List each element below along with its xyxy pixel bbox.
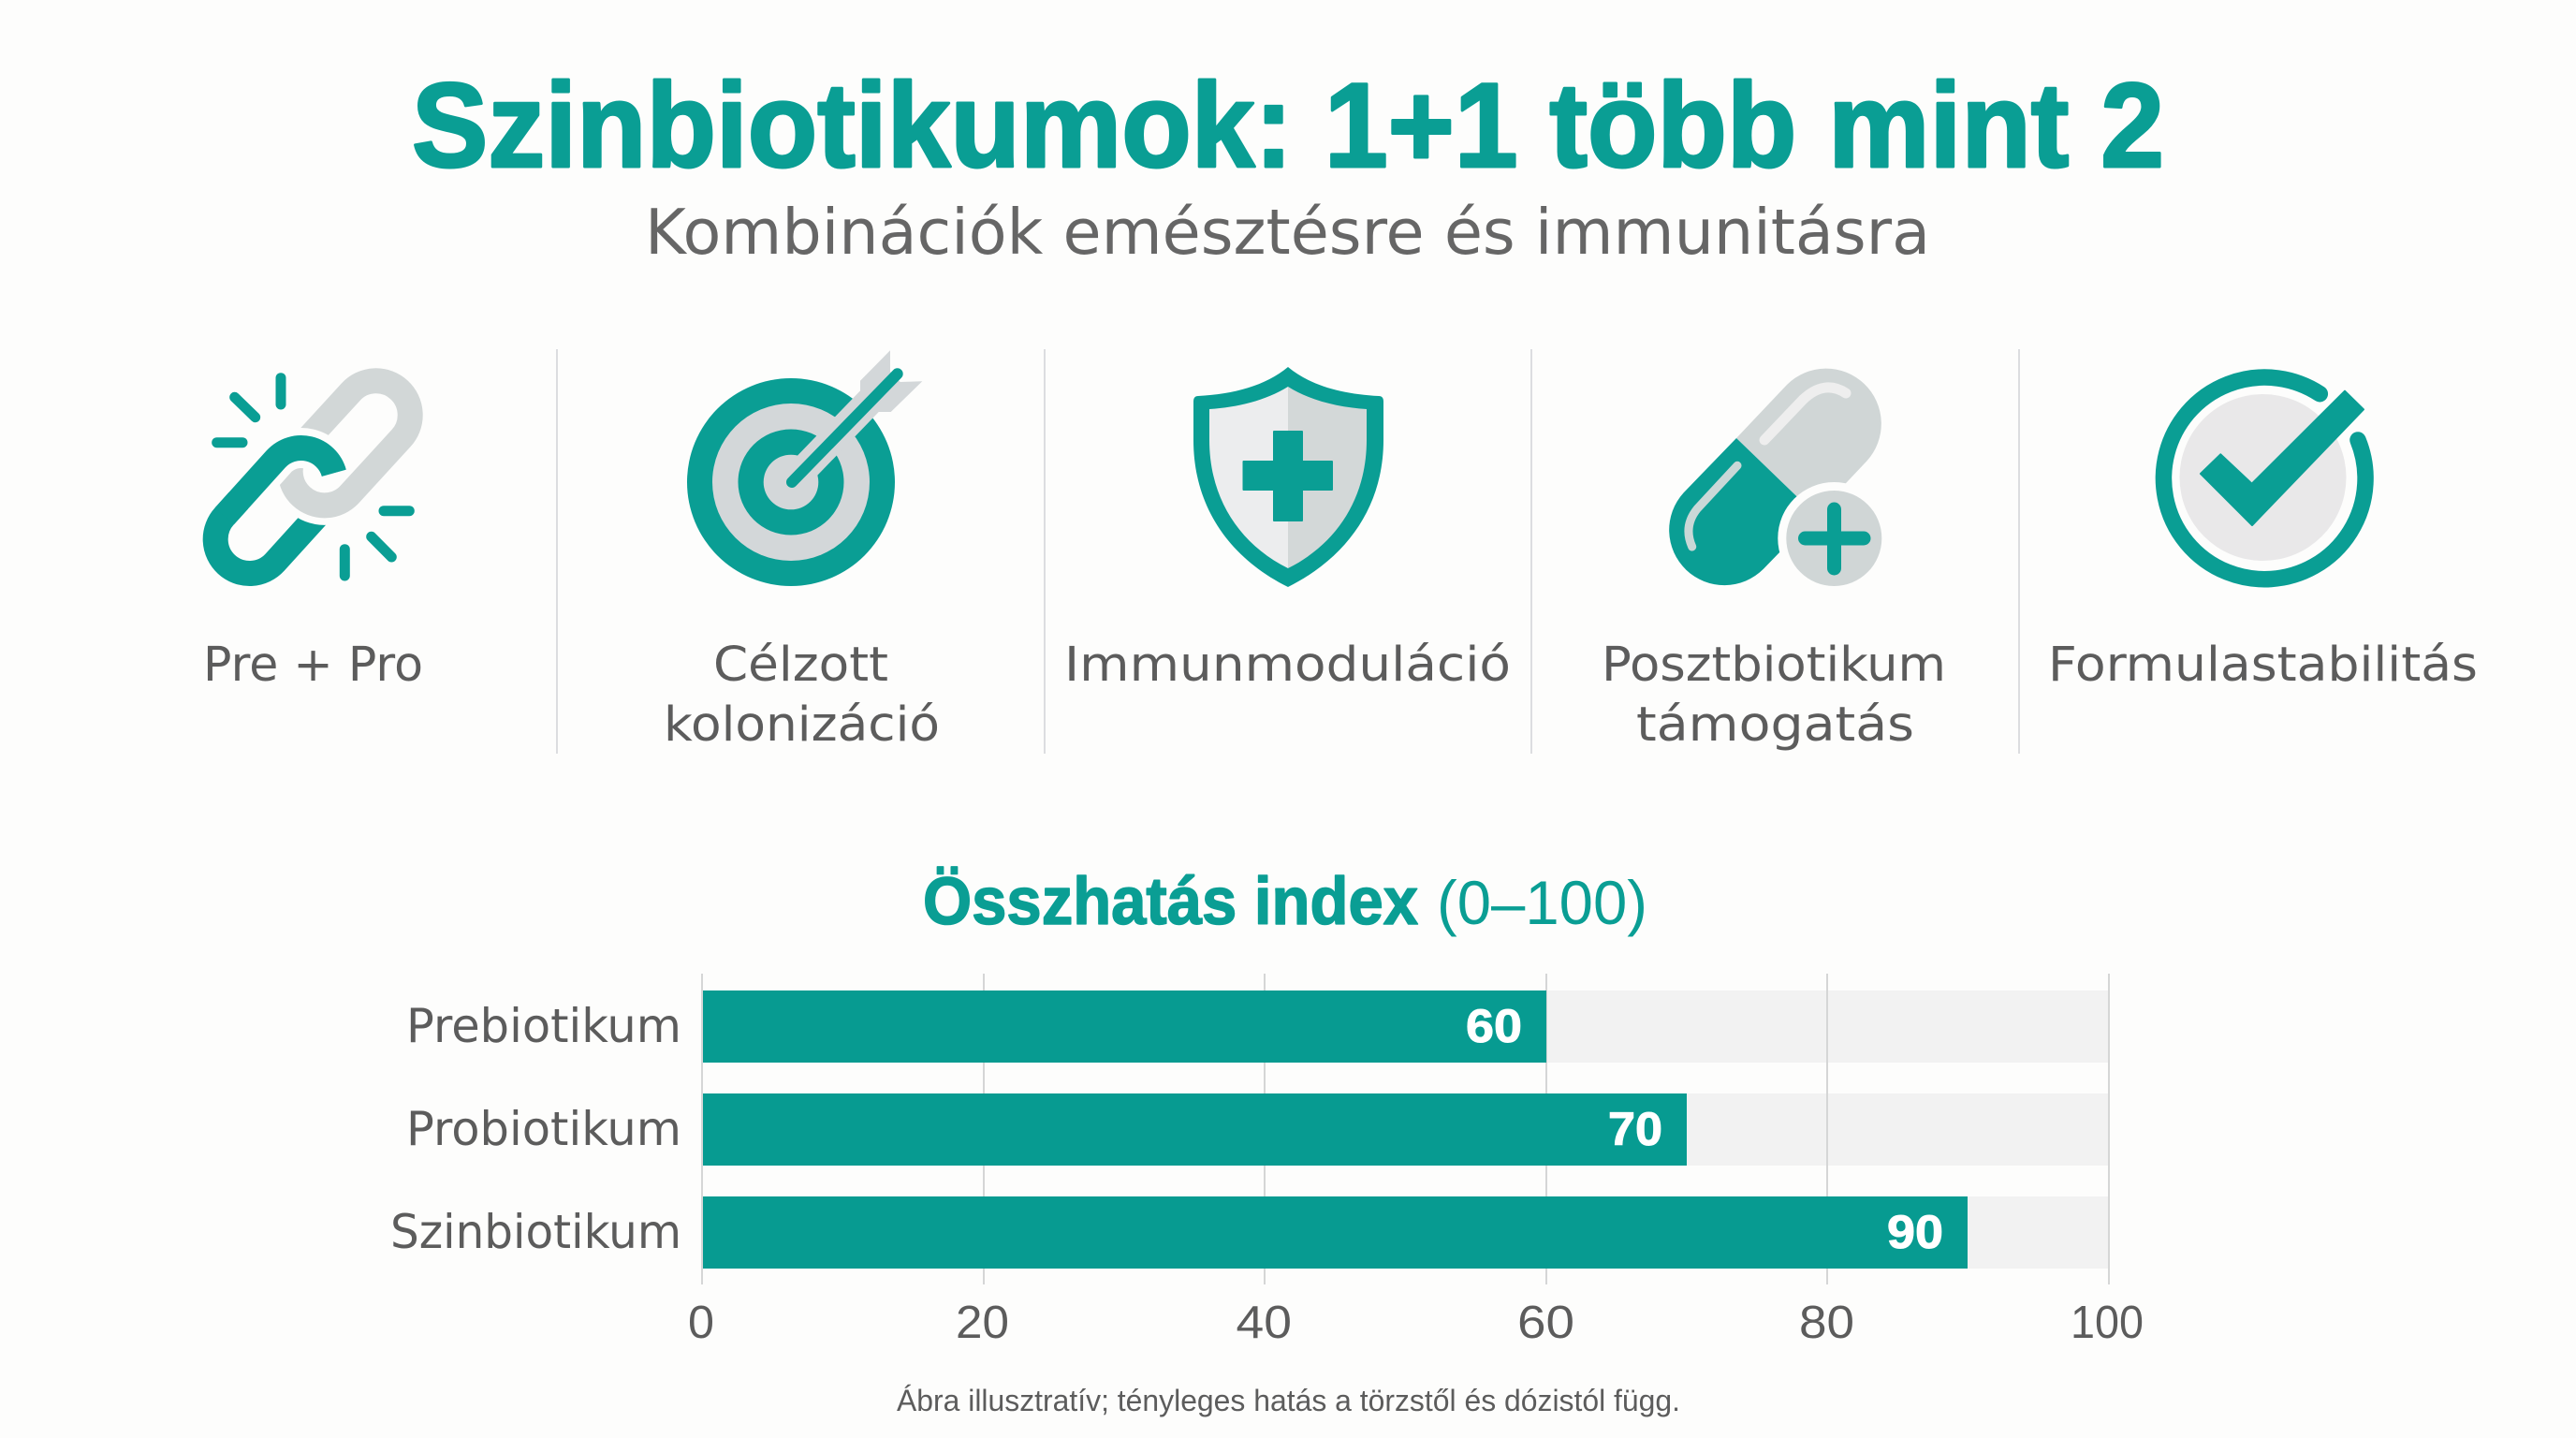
title: Szinbiotikumok: 1+1 több mint 2 <box>412 59 2164 193</box>
label: Posztbiotikum támogatás: támogatás <box>1636 697 1914 753</box>
icon: shield with cross <box>1193 367 1383 587</box>
bar: Szinbiotikum 90 <box>703 1196 1968 1269</box>
chart heading: Összhatás index <box>923 865 1418 939</box>
axis labels: 40 <box>1236 1298 1292 1348</box>
category labels: Prebiotikum <box>406 999 681 1053</box>
label: Célzott kolonizáció <box>664 638 940 753</box>
icon: target with arrow <box>687 350 922 586</box>
footnote: Ábra illusztratív; tényleges hatás a törzstől és dózistól függ. <box>897 1384 1680 1417</box>
axis labels: 20 <box>956 1298 1009 1348</box>
bar: Prebiotikum 60: 60 <box>1466 1000 1522 1052</box>
icon: check in circle <box>2163 377 2365 580</box>
bar: Prebiotikum 60 <box>703 990 1546 1063</box>
bar tracks <box>702 990 2109 1269</box>
subtitle: Kombinációk emésztésre és immunitásra <box>645 196 1930 269</box>
category labels: Szinbiotikum <box>390 1205 681 1259</box>
axis labels: 60 <box>1517 1298 1574 1348</box>
label: Posztbiotikum támogatás: Posztbiotikum <box>1602 638 1946 693</box>
bar chart <box>390 974 2144 1348</box>
panel: Immunmoduláció <box>1064 367 1511 693</box>
label: Formulastabilitás: Formulastabilitás <box>2048 638 2478 693</box>
label: Posztbiotikum támogatás <box>1602 638 1946 753</box>
panel: Posztbiotikum támogatás <box>1602 369 1946 753</box>
label: Immunmoduláció: Immunmoduláció <box>1064 638 1511 693</box>
bar: Szinbiotikum 90: 90 <box>1887 1206 1943 1258</box>
axis labels <box>688 1298 2144 1348</box>
axis labels: 100 <box>2071 1298 2144 1348</box>
category labels: Probiotikum <box>406 1102 681 1156</box>
axis labels: 80 <box>1799 1298 1854 1348</box>
chart heading: (0–100) <box>1437 868 1647 937</box>
icon: capsule with plus <box>1669 369 1890 594</box>
panel: Pre + Pro <box>203 378 423 693</box>
panel: Formulastabilitás <box>2048 377 2478 693</box>
bar: Probiotikum 70: 70 <box>1608 1103 1662 1155</box>
label: Célzott kolonizáció: Célzott <box>713 638 888 693</box>
bar: Probiotikum 70 <box>703 1093 1687 1166</box>
axis labels: 0 <box>688 1298 714 1348</box>
icon: broken chain link <box>215 378 410 576</box>
panel: Célzott kolonizáció <box>664 350 940 753</box>
category labels <box>390 999 681 1259</box>
label: Pre + Pro: Pre + Pro <box>203 638 423 693</box>
label: Célzott kolonizáció: kolonizáció <box>664 697 940 753</box>
